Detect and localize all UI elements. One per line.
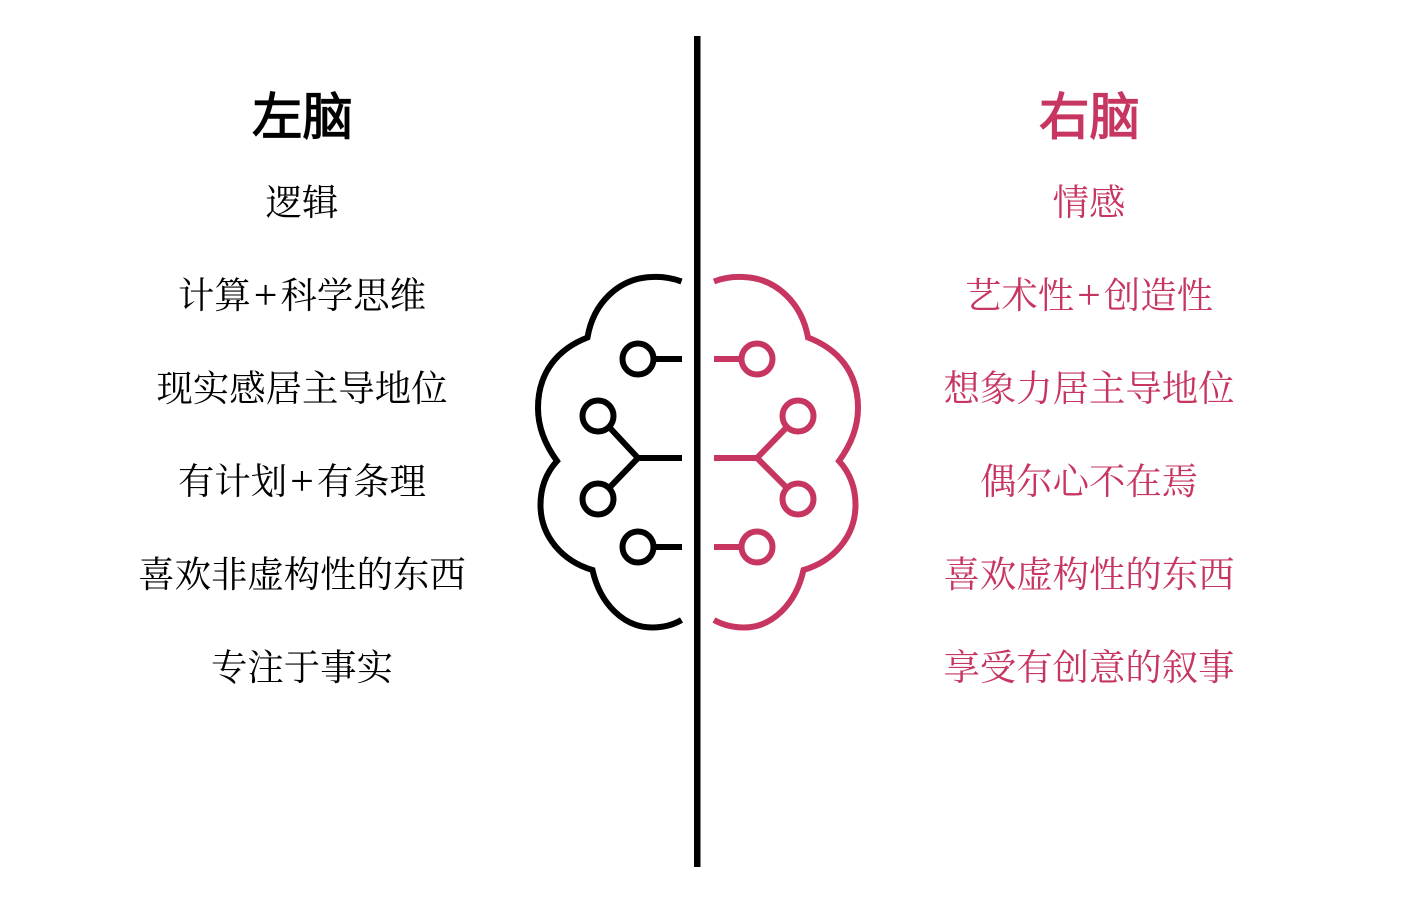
text: imagination dominant: 想象力居主导地位 — [943, 369, 1235, 409]
text: focuses on facts: 专注于事实 — [211, 648, 393, 688]
text: planned and organized: 有条理 — [317, 462, 426, 502]
text: computing and scientific thinking: + — [254, 273, 277, 319]
text: artistry and creativity: 艺术性 — [965, 276, 1074, 316]
center divider line — [694, 36, 700, 867]
text: logic: 逻辑 — [266, 183, 338, 223]
panel: left brain text — [138, 88, 466, 688]
text: likes non-fiction: 喜欢非虚构性的东西 — [138, 555, 466, 595]
text: emotion: 情感 — [1053, 183, 1126, 223]
text: computing and scientific thinking: 科学思维 — [280, 276, 426, 316]
text: occasionally absent-minded: 偶尔心不在焉 — [980, 462, 1198, 502]
text: planned and organized: + — [290, 459, 314, 505]
panel: right brain text — [943, 88, 1235, 688]
heading: right brain: 右脑 — [1039, 88, 1140, 146]
text: computing and scientific thinking: 计算 — [178, 276, 251, 316]
text: likes fiction: 喜欢虚构性的东西 — [943, 555, 1235, 595]
text: planned and organized: 有计划 — [178, 462, 287, 502]
text: artistry and creativity: + — [1077, 273, 1101, 319]
icon: left brain half — [538, 277, 682, 628]
heading: left brain: 左脑 — [252, 88, 353, 146]
text: artistry and creativity: 创造性 — [1104, 276, 1213, 316]
icon: right brain half — [714, 277, 858, 628]
text: enjoys creative narrative: 享受有创意的叙事 — [943, 648, 1235, 688]
text: realism dominant: 现实感居主导地位 — [156, 369, 448, 409]
